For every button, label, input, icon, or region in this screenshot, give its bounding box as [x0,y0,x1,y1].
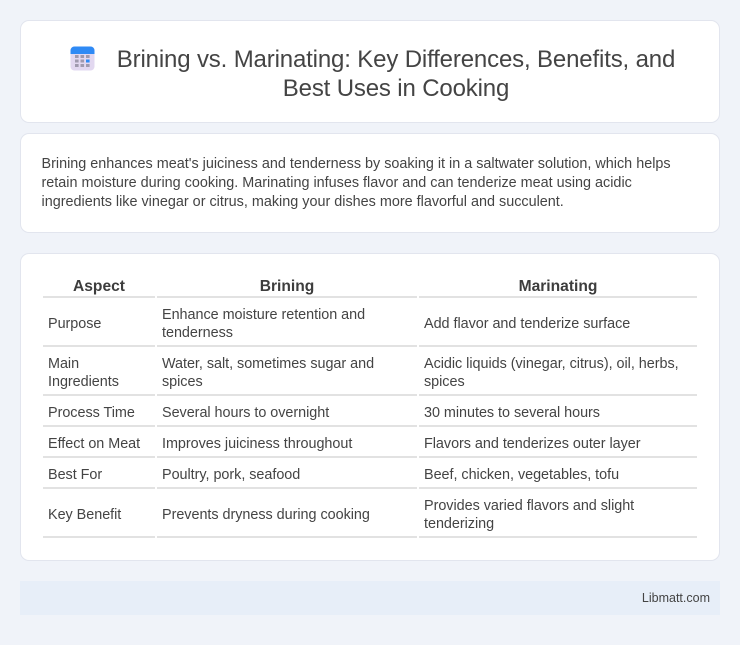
panel: comparison table [20,253,720,561]
row: best for: Poultry, pork, seafood [162,467,300,483]
footer credit: Libmatt.com [642,591,710,605]
row: best for: Beef, chicken, vegetables, tofu [424,467,619,483]
row: main ingredients: Main [48,356,79,372]
intro paragraph [42,156,671,210]
row: purpose [48,307,630,341]
icon: calendar [70,46,94,70]
intro paragraph: Brining enhances meat's juiciness and tenderness by soaking it in a saltwater solution, which helps [42,156,671,172]
row: key benefit: Prevents dryness during cooking [162,507,370,523]
row: process time: 30 minutes to several hours [424,405,600,421]
row: effect on meat: Effect on Meat [48,436,140,452]
intro paragraph: retain moisture during cooking. Marinating infuses flavor and can tenderize meat using acidic [42,175,632,191]
row: main ingredients: spices [162,374,203,390]
row: process time [48,405,600,421]
intro paragraph: ingredients like vinegar or citrus, making your dishes more flavorful and succulent. [42,194,564,210]
title: Best Uses in Cooking [283,75,509,102]
row: effect on meat: Flavors and tenderizes outer layer [424,436,641,452]
row: purpose: tenderness [162,325,233,341]
row: key benefit: Key Benefit [48,507,121,523]
table header: Aspect [73,278,125,295]
row: purpose: Add flavor and tenderize surface [424,316,630,332]
table header: Brining [260,278,314,295]
title [117,46,675,102]
row: main ingredients: spices [424,374,465,390]
row: best for [48,467,619,483]
title: Brining vs. Marinating: Key Differences, Benefits, and [117,46,675,72]
row: key benefit: tenderizing [424,516,494,532]
row: effect on meat: Improves juiciness throughout [162,436,352,452]
row: main ingredients: Ingredients [48,374,119,390]
row: purpose: Enhance moisture retention and [162,307,365,323]
table header [73,278,597,295]
row: process time: Process Time [48,405,135,421]
panel: title card [20,20,720,123]
table header: Marinating [519,278,597,295]
row: main ingredients: Acidic liquids (vinegar, citrus), oil, herbs, [424,356,679,372]
panel: introduction text [20,133,720,233]
row: key benefit: Provides varied flavors and slight [424,498,634,514]
row: best for: Best For [48,467,102,483]
row: effect on meat [48,436,641,452]
row: main ingredients [48,356,679,390]
row: process time: Several hours to overnight [162,405,329,421]
footer bar [20,581,720,615]
row: key benefit [48,498,634,532]
row: purpose: Purpose [48,316,101,332]
row: main ingredients: Water, salt, sometimes sugar and [162,356,374,372]
